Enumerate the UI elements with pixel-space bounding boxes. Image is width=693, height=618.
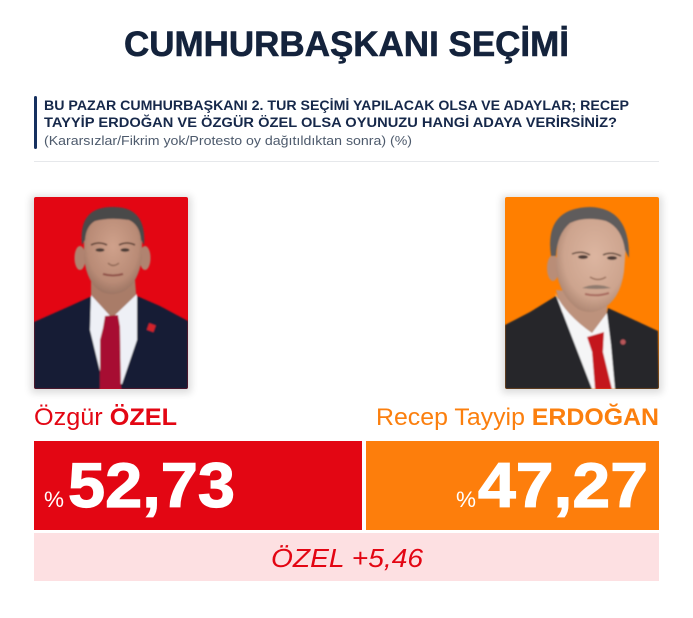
mouth xyxy=(585,293,609,295)
nose shadow xyxy=(108,263,119,266)
result bar: Özel xyxy=(34,441,362,530)
brows and eyes xyxy=(91,243,135,245)
neck xyxy=(556,290,608,335)
portrait: Recep Tayyip Erdoğan xyxy=(502,196,662,393)
title: CUMHURBAŞKANI SEÇİMİ xyxy=(124,25,569,64)
question line 1: BU PAZAR CUMHURBAŞKANI 2. TUR SEÇİMİ YAPILACAK OLSA VE ADAYLAR; RECEP xyxy=(44,98,629,113)
moustache xyxy=(582,285,611,289)
suit xyxy=(505,296,659,389)
brows and eyes xyxy=(572,252,621,256)
value: 52,73 xyxy=(68,451,235,521)
tie xyxy=(100,315,121,389)
ears xyxy=(74,246,86,270)
margin callout xyxy=(34,533,659,581)
neck xyxy=(91,280,137,322)
question block xyxy=(34,96,629,149)
face xyxy=(556,216,626,312)
result bar: Erdoğan xyxy=(366,441,659,530)
face xyxy=(84,212,142,294)
shirt xyxy=(555,293,615,389)
tie xyxy=(587,332,612,389)
name: Recep Tayyip Erdoğan: Recep Tayyip ERDOĞAN xyxy=(376,403,659,431)
shirt xyxy=(90,294,137,384)
mouth xyxy=(103,274,123,276)
hair xyxy=(550,207,629,258)
pin xyxy=(620,339,626,345)
value: 47,27 xyxy=(478,451,648,521)
percent sign: % xyxy=(44,487,64,512)
percent sign: % xyxy=(456,487,476,512)
margin text: ÖZEL +5,46 xyxy=(271,543,424,573)
question line 2: TAYYİP ERDOĞAN VE ÖZGÜR ÖZEL OLSA OYUNUZU HANGİ ADAYA VERİRSİNİZ? xyxy=(44,115,617,130)
nose shadow xyxy=(590,277,606,280)
name: Özgür Özel: Özgür ÖZEL xyxy=(34,404,177,431)
accent bar xyxy=(34,96,37,149)
portrait: Özgür Özel xyxy=(31,196,191,393)
question note: (Kararsızlar/Fikrim yok/Protesto oy dağıtıldıktan sonra) (%) xyxy=(44,133,412,148)
hair xyxy=(82,207,144,245)
suit xyxy=(34,296,188,389)
ear xyxy=(547,255,559,281)
pin xyxy=(147,323,156,332)
